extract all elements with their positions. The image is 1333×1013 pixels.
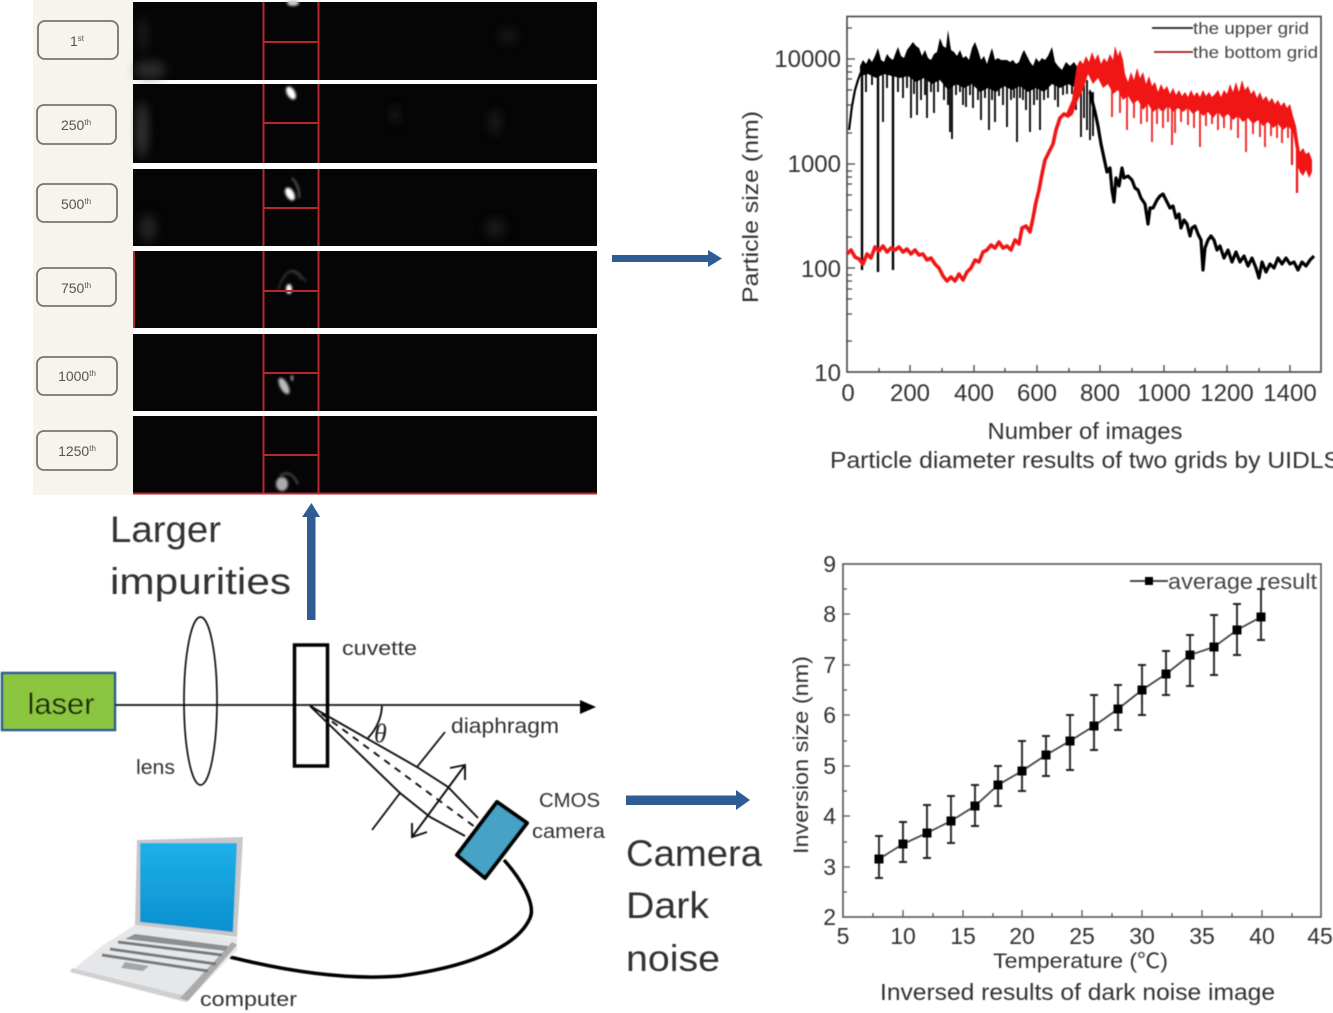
data markers xyxy=(874,612,1266,864)
frame strip: 1250th xyxy=(133,416,597,494)
heading: camera dark noise: noise xyxy=(626,938,720,979)
frame label: 1st: st xyxy=(78,34,85,43)
frame strip: 500th xyxy=(133,169,597,246)
x axis labels: 1000 xyxy=(1137,380,1191,407)
x axis title: Number of images xyxy=(988,418,1182,444)
error bars xyxy=(875,589,1265,878)
x axis labels: 1200 xyxy=(1200,380,1254,407)
diaphragm xyxy=(372,715,559,830)
heading: larger impurities: Larger xyxy=(110,509,221,550)
laptop computer xyxy=(70,837,297,1011)
plot frame xyxy=(843,564,1321,917)
frame label: 1250th: 1250 xyxy=(58,443,89,459)
arrow: cuvette up to frames xyxy=(302,503,320,620)
frame label: 750th: 750 xyxy=(61,280,84,296)
CMOS camera: CMOS xyxy=(539,790,600,812)
frame label: 1250th: th xyxy=(89,444,96,453)
heading: camera dark noise: Camera xyxy=(626,833,762,874)
arrow: frames to particle size chart xyxy=(612,250,722,267)
y axis title: Inversion size (nm) xyxy=(790,656,813,854)
x axis labels: 40 xyxy=(1249,923,1275,949)
panel: optical setup xyxy=(2,617,606,1011)
beam with arrow xyxy=(115,704,582,706)
cuvette: cuvette xyxy=(342,638,417,660)
x axis labels: 20 xyxy=(1009,923,1035,949)
frame label: 1000th: th xyxy=(89,369,96,378)
x axis labels: 5 xyxy=(837,923,849,949)
series: the upper grid xyxy=(849,30,1314,278)
series: the bottom grid xyxy=(847,46,1312,281)
y axis labels: 7 xyxy=(823,652,836,678)
y axis labels xyxy=(823,551,836,930)
x axis labels: 0 xyxy=(841,380,855,407)
y axis labels: 5 xyxy=(823,753,836,779)
chart: particle size by image number xyxy=(738,16,1333,473)
frame label: 1250th xyxy=(37,431,117,470)
legend: the upper grid xyxy=(1193,19,1309,38)
chart caption: Particle diameter results of two grids by UIDLS xyxy=(830,447,1333,473)
y axis labels xyxy=(774,46,841,387)
x axis labels: 200 xyxy=(890,380,930,407)
cuvette xyxy=(294,638,417,766)
frame label: 500th xyxy=(37,184,117,222)
y axis title: Particle size (nm) xyxy=(738,111,763,303)
y axis labels: 10 xyxy=(814,360,841,387)
x axis labels: 1400 xyxy=(1263,380,1317,407)
frame label: 500th: th xyxy=(84,197,91,206)
chart: inversion size vs temperature xyxy=(790,551,1333,1005)
x axis labels: 10 xyxy=(890,923,916,949)
y axis labels: 6 xyxy=(823,702,836,728)
frame label: 500th: 500 xyxy=(61,196,84,212)
frame label: 250th xyxy=(37,105,116,144)
frame label: 1st: 1 xyxy=(70,33,78,49)
legend: average result xyxy=(1168,569,1317,594)
CMOS camera xyxy=(457,790,606,878)
label column background xyxy=(33,0,133,495)
plot frame xyxy=(847,16,1321,372)
angle theta: θ xyxy=(374,719,387,748)
x axis labels: 45 xyxy=(1307,923,1333,949)
x axis labels: 35 xyxy=(1189,923,1215,949)
y axis labels: 3 xyxy=(823,854,836,880)
chart caption: Inversed results of dark noise image xyxy=(880,979,1275,1005)
y axis labels: 2 xyxy=(823,904,836,930)
frame strip: 1000th xyxy=(133,334,597,411)
heading: camera dark noise xyxy=(626,833,762,979)
frame label: 1000th xyxy=(37,357,117,395)
legend xyxy=(1152,19,1318,62)
frame label: 1st xyxy=(38,21,118,59)
frame label: 750th: th xyxy=(84,281,91,290)
frame strip: 750th xyxy=(133,251,597,328)
x axis labels xyxy=(837,923,1333,949)
y axis labels: 100 xyxy=(801,256,841,283)
frame label: 250th: th xyxy=(84,118,91,127)
x axis labels: 25 xyxy=(1069,923,1095,949)
imaging lens double arrow xyxy=(412,765,465,837)
x axis labels: 30 xyxy=(1129,923,1155,949)
cable xyxy=(230,860,531,977)
laser source: laser xyxy=(28,688,95,721)
panel: image sequence xyxy=(33,0,597,495)
axis ticks xyxy=(847,28,1290,372)
x axis labels: 15 xyxy=(950,923,976,949)
laser source xyxy=(2,673,115,730)
lens: lens xyxy=(136,757,175,779)
scattered light rays xyxy=(310,706,478,836)
frame strip: 250th xyxy=(133,84,597,163)
frame strip: 1st xyxy=(133,0,597,80)
arrow: camera to dark noise chart xyxy=(626,790,750,810)
heading: camera dark noise: Dark xyxy=(626,885,710,926)
y axis labels: 1000 xyxy=(788,151,841,178)
y axis labels: 9 xyxy=(823,551,836,577)
frame label: 250th: 250 xyxy=(61,117,84,133)
diaphragm: diaphragm xyxy=(451,715,559,738)
heading: larger impurities: impurities xyxy=(110,561,291,602)
frame label: 750th xyxy=(37,268,116,306)
laptop computer: computer xyxy=(200,989,297,1011)
y axis labels: 8 xyxy=(823,601,836,627)
x axis labels: 800 xyxy=(1080,380,1120,407)
legend: the bottom grid xyxy=(1193,43,1318,62)
x axis title: Temperature (℃) xyxy=(993,950,1168,973)
lens xyxy=(136,617,217,785)
series line xyxy=(879,617,1261,859)
heading: larger impurities xyxy=(110,509,291,602)
axis ticks xyxy=(843,589,1292,917)
x axis labels: 600 xyxy=(1017,380,1057,407)
y axis labels: 10000 xyxy=(774,46,841,73)
x axis labels: 400 xyxy=(954,380,994,407)
CMOS camera: camera xyxy=(532,821,606,843)
frame label: 1000th: 1000 xyxy=(58,368,89,384)
y axis labels: 4 xyxy=(823,803,836,829)
x axis labels xyxy=(841,380,1317,407)
